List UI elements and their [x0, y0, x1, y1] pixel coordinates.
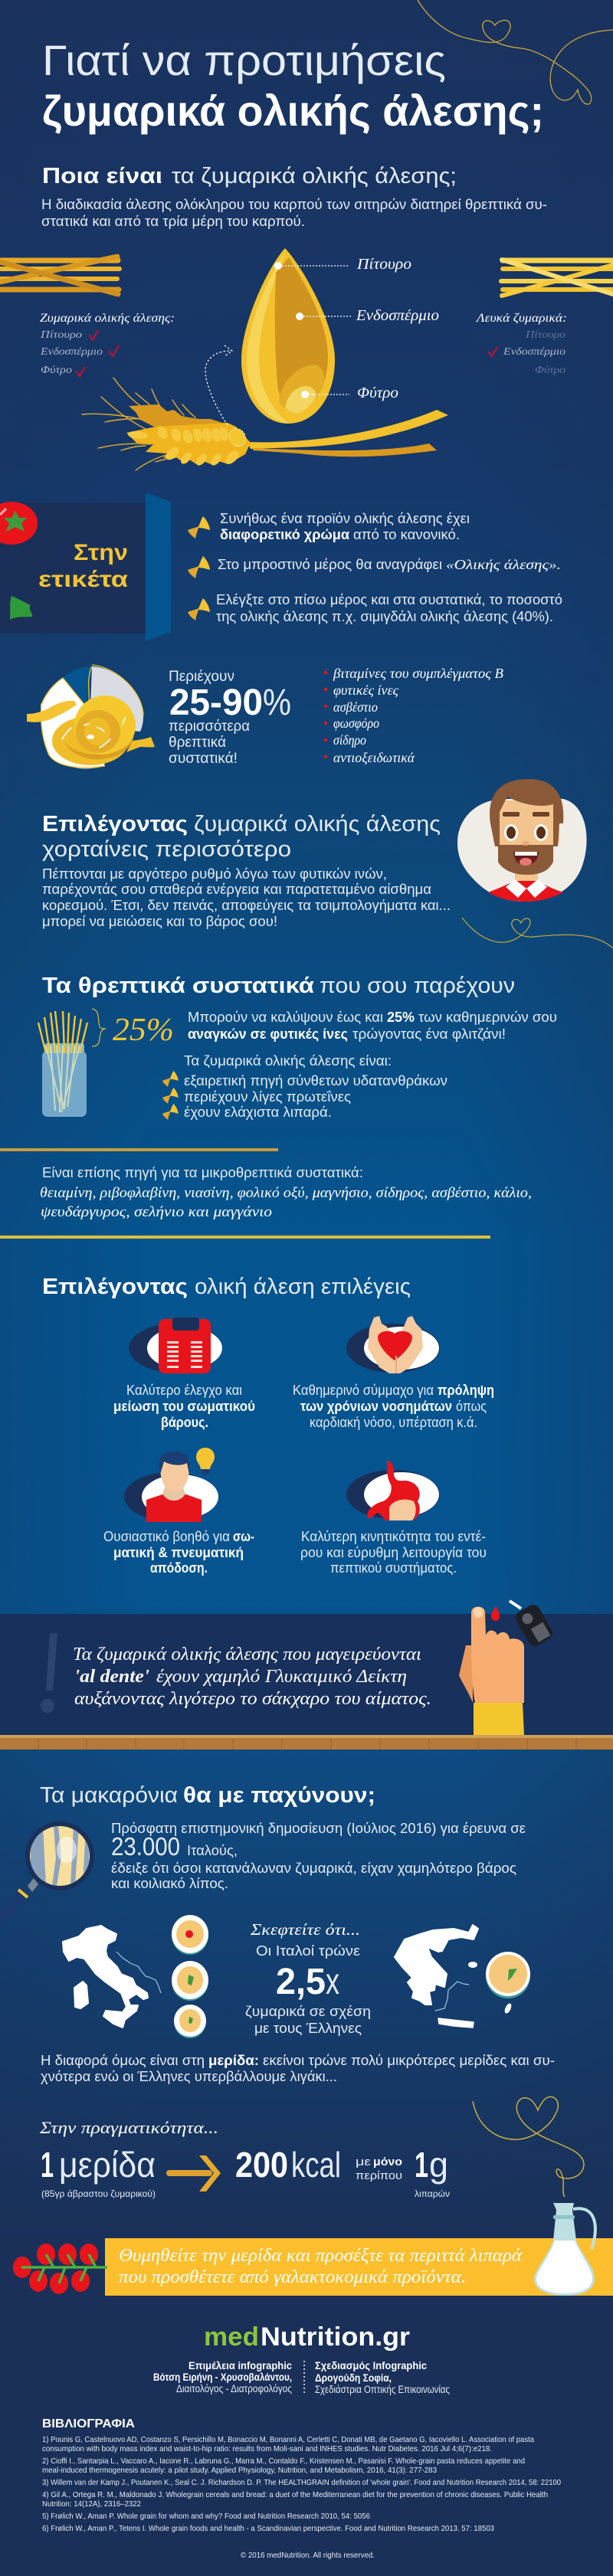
stat: 25-90% more nutrients [169, 669, 291, 767]
list: whole grain pasta parts: Ενδοσπέρμιο [40, 346, 103, 358]
benefit text: weight: Καλύτερο έλεγχο και [126, 1383, 242, 1398]
benefit text: chronic disease: των χρόνιων νοσημάτων [300, 1399, 452, 1414]
text: portion difference: Η διαφορά όμως είναι στη [41, 2052, 205, 2068]
text: micronutrients [40, 1164, 532, 1220]
text: micronutrients: ψευδάργυρος, σελήνιο και μαγγάνιο [41, 1204, 272, 1220]
heading: feeling fuller: ζυμαρικά ολικής άλεσης [194, 812, 441, 836]
icon: hands holding heart [346, 1316, 440, 1373]
credits: editing: Διαιτολόγος - Διατροφολόγος [176, 2383, 292, 2394]
list of nutrients: φωσφόρο [333, 715, 379, 731]
references: 6) Frølich W., Aman P., Tetens I. Whole grain foods and health - a Scandinavian perspective. Food and Nutrition Research 2013. 57: 18503 [42, 2524, 494, 2533]
icon: scale [129, 1317, 222, 1373]
logo: medNutrition.gr [204, 2322, 410, 2352]
text: 23,000 Italians study: Ιταλούς, [187, 1843, 238, 1858]
benefit text: digestion [300, 1529, 487, 1576]
heading: will pasta make me fat [40, 1783, 375, 1808]
references: Nutrition: 14(12A), 2316–2322 [42, 2499, 141, 2509]
heading: on the label: ετικέτα [38, 567, 129, 592]
map: Greece [395, 1925, 513, 2028]
label tip 1: από το κανονικό. [353, 526, 460, 542]
callout text: αυξάνοντας λιγότερο το σάκχαρο του αίματος. [74, 1689, 431, 1709]
stat: 200 kcal [235, 2145, 341, 2185]
benefit text: chronic disease: όπως [456, 1399, 487, 1414]
stat: 25-90% more nutrients: Περιέχουν [169, 669, 234, 685]
title: ζυμαρικά ολικής άλεσης; [42, 87, 544, 135]
stat: Italians eat 2.5x: ζυμαρικά σε σχέση [245, 2003, 371, 2019]
heading: what is whole grain pasta: τα ζυμαρικά ολικής άλεσης; [172, 164, 457, 188]
banner: watch the portion: Θυμηθείτε την μερίδα και προσέξτε τα περιττά λιπαρά [119, 2246, 522, 2266]
list: white pasta parts: Φύτρο [535, 365, 565, 376]
stat: 1 g fat: λιπαρών [415, 2188, 450, 2199]
intro text: Η διαδικασία άλεσης ολόκληρου του καρπού των σιτηρών διατηρεί θρεπτικά συ- [41, 197, 547, 212]
text: portion difference [41, 2052, 555, 2084]
text: 23,000 Italians study: και κοιλιακό λίπος. [111, 1875, 228, 1891]
heading: benefits [42, 1275, 411, 1299]
text: micronutrients: Είναι επίσης πηγή για τα μικροθρεπτικά συστατικά: [42, 1164, 363, 1180]
list: whole grain pasta parts: Πίτουρο [40, 329, 82, 341]
benefit text: chronic disease [293, 1383, 494, 1430]
list: whole grain pasta parts: Ζυμαρικά ολικής άλεσης: [40, 312, 175, 325]
exclamation mark [41, 1633, 57, 1713]
text: 23,000 Italians study: Πρόσφατη επιστημονική δημοσίευση (Ιούλιος 2016) για έρευνα σε [111, 1820, 526, 1836]
benefit text: digestion: ρου και εύρυθμη λειτουργία του [300, 1545, 487, 1560]
list: whole grain pasta parts [40, 312, 175, 376]
label tip 1: διαφορετικό χρώμα [220, 526, 350, 542]
list of nutrients: σίδηρο [333, 732, 366, 748]
benefit text: weight [113, 1383, 255, 1430]
text: 25 percent fibre: αναγκών σε φυτικές ίνες [188, 1026, 348, 1042]
text: portion difference: χνότερα ενώ οι Έλληνες υπερβάλλουμε λιγάκι... [41, 2068, 337, 2084]
plate: one large portion [486, 1952, 530, 1998]
panel: on the label [0, 493, 171, 641]
references: 4) Gil A., Ortega R. M., Maldonado J. Wholegrain cereals and bread: a duet of the Mediterranean diet for the prevention of chronic diseases. Public Health [42, 2490, 548, 2499]
text: 25 percent fibre [188, 1009, 557, 1042]
list: properties of whole grain pasta [162, 1052, 447, 1120]
stat: 25-90% more nutrients: θρεπτικά [169, 735, 226, 751]
list: properties of whole grain pasta: περιέχουν λίγες πρωτεΐνες [184, 1088, 351, 1105]
icon: cherry tomatoes on the vine [13, 2244, 107, 2294]
heading: benefits: Επιλέγοντας [42, 1275, 188, 1299]
label tip 2 [188, 556, 561, 578]
label: germ: Φύτρο [357, 385, 398, 401]
heading: nutrients [42, 974, 515, 998]
logo: medNutrition.gr: Nutrition.gr [261, 2322, 410, 2352]
stat: Italians eat 2.5x [245, 1920, 371, 2036]
decorative curl with heart: right middle [462, 918, 613, 948]
stat: Italians eat 2.5x: Σκεφτείτε ότι... [250, 1920, 360, 1939]
text: with only about [356, 2155, 402, 2182]
stat: 1 portion: 1 [41, 2145, 54, 2185]
benefit text: chronic disease: πρόληψη [438, 1383, 494, 1398]
stat: 1 g fat: 1 [415, 2145, 428, 2185]
banner: watch the portion [105, 2238, 613, 2296]
heading: what is whole grain pasta: Ποια είναι [42, 164, 162, 188]
heading: feeling fuller: Επιλέγοντας [42, 812, 188, 836]
label tip 2: «Ολικής άλεσης». [446, 557, 561, 572]
icon: tomato [0, 502, 38, 545]
list of nutrients: ασβέστιο [333, 699, 378, 715]
title [42, 36, 544, 135]
credits: editing: Βότση Ειρήνη - Χρυσοβαλάντου, [153, 2371, 292, 2383]
stat: 200 kcal: 200 [235, 2145, 288, 2185]
text: fullness paragraph: κορεσμού. Έτσι, δεν πεινάς, αποφεύγεις τα τσιμπολογήματα και... [42, 898, 451, 913]
label: endosperm [296, 307, 439, 324]
stat: Italians eat 2.5x: x [326, 1962, 339, 2002]
panel: al dente callout [0, 1601, 613, 1750]
list: whole grain pasta parts: Φύτρο [41, 365, 72, 376]
benefit text: performance: απόδοση. [150, 1560, 208, 1576]
references: 1) Pounis G, Castelnuovo AD, Costanzo S, Persichillo M, Bonaccio M, Bonanni A, Cerletti C, Donati MB, de Gaetano G, Iacoviello L. Association of pasta [42, 2435, 534, 2444]
stat: 25-90% more nutrients: 25-90 [169, 682, 263, 723]
references: consumption with body mass index and waist-to-hip ratio: results from Moli-sani and INHES studies. Nutr Diabetes. 2016 Jul 4;6(7):e218. [42, 2444, 492, 2453]
label tip 3 [188, 591, 562, 624]
benefit text: performance: σω- [233, 1529, 254, 1544]
callout text: Τα ζυμαρικά ολικής άλεσης που μαγειρεύονται [73, 1645, 421, 1664]
benefit text: chronic disease: καρδιακή νόσο, υπέρταση κ.ά. [310, 1415, 477, 1430]
heading: bibliography: ΒΙΒΛΙΟΓΡΑΦΙΑ [42, 2417, 135, 2430]
wheat grain cross-section [241, 248, 335, 424]
wood shelf [0, 1735, 613, 1750]
icon: milk jug [534, 2203, 595, 2296]
stat: 200 kcal: kcal [291, 2145, 341, 2185]
references [42, 2435, 561, 2533]
text: with only about: περίπου [356, 2169, 402, 2182]
list of nutrients: φυτικές ίνες [333, 682, 399, 698]
text: 25 percent fibre: τρώγοντας ένα φλιτζάνι! [352, 1026, 506, 1042]
label tip 3: Ελέγξτε στο πίσω μέρος και στα συστατικά, το ποσοστό [216, 591, 562, 607]
icon: man with light bulb [124, 1448, 218, 1522]
icon: finger, blood drop and glucose meter [459, 1601, 555, 1735]
heading: will pasta make me fat: θα με παχύνουν; [183, 1783, 375, 1808]
title: Γιατί να προτιμήσεις [42, 36, 446, 84]
plates: three small portions [172, 1915, 208, 2038]
pie chart with pasta nest [27, 665, 155, 768]
benefit text: digestion: πεπτικού συστήματος. [330, 1560, 457, 1576]
label: endosperm: Ενδοσπέρμιο [356, 307, 439, 324]
map: Italy [63, 1926, 161, 2028]
list of nutrients: αντιοξειδωτικά [333, 750, 415, 765]
text: 25 percent fibre: 25% [387, 1009, 415, 1025]
text: fullness paragraph: παρέχοντάς σου σταθερά ενέργεια και παρατεταμένο αίσθημα [42, 882, 431, 897]
credits: design: Σχεδιάστρια Οπτικής Επικοινωνίας [315, 2384, 450, 2395]
icon: jar of spaghetti [38, 1011, 87, 1117]
callout text: 'al dente' [74, 1667, 149, 1687]
banner: watch the portion: που προσθέτετε από γαλακτοκομικά προϊόντα. [119, 2267, 466, 2287]
list: white pasta parts: Ενδοσπέρμιο [503, 346, 565, 358]
label tip 1: Συνήθως ένα προϊόν ολικής άλεσης έχει [220, 510, 470, 526]
stat: Italians eat 2.5x: Οι Ιταλοί τρώνε [256, 1943, 360, 1959]
arrow [166, 2155, 221, 2191]
copyright: © 2016 medNutrition. All rights reserved. [241, 2551, 375, 2560]
text: with only about: μόνο [373, 2155, 402, 2168]
heading: on the label [38, 540, 129, 592]
references: 3) Willem van der Kamp J., Poutanen K., Seal C. J. Richardson D. P. The HEALTHGRAIN definition of 'whole grain'. Food and Nutrition Research 2014, 58: 22100 [42, 2478, 561, 2487]
text: 23,000 Italians study: 23.000 [111, 1832, 180, 1861]
stat: 25-90% more nutrients: συστατικά! [169, 751, 238, 767]
text: portion difference: εκείνοι τρώνε πολύ μικρότερες μερίδες και συ- [263, 2052, 555, 2068]
text: micronutrients: θειαμίνη, ριβοφλαβίνη, νιασίνη, φολικό οξύ, μαγνήσιο, σίδηρος, ασβέστιο, κάλιο, [40, 1185, 532, 1201]
credits: design: Δρογούδη Σοφία, [315, 2372, 392, 2384]
text: with only about: με [356, 2155, 371, 2168]
whole grain spaghetti: left [0, 257, 120, 294]
benefit text: weight: μείωση του σωματικού [113, 1399, 255, 1414]
heading: nutrients: που σου παρέχουν [320, 974, 515, 998]
text: fullness paragraph: Πέπτονται με αργότερο ρυθμό λόγω των φυτικών ινών, [42, 866, 387, 882]
label tip 2: Στο μπροστινό μέρος θα αναγράφει [218, 556, 442, 572]
stat: 1 g fat: g [429, 2145, 448, 2185]
stat: 25-90% more nutrients: περισσότερα [169, 718, 250, 735]
intro text: στατικά και από τα τρία μέρη του καρπού. [41, 214, 305, 229]
icon: magnifying glass over spaghetti [0, 1822, 94, 1920]
heading: will pasta make me fat: Τα μακαρόνια [40, 1783, 178, 1808]
label: germ [301, 385, 398, 401]
stat: 1 portion: (85γρ άβραστου ζυμαρικού) [41, 2188, 156, 2199]
credits: editing: Επιμέλεια infographic [188, 2360, 292, 2371]
brace and 25 percent: 25% [113, 1013, 174, 1048]
text: 25 percent fibre: των καθημερινών σου [418, 1009, 557, 1025]
list of nutrients [324, 666, 503, 765]
brace and 25 percent [92, 1009, 174, 1048]
callout text: έχουν χαμηλό Γλυκαιμικό Δείκτη [156, 1667, 407, 1687]
stat: 25-90% more nutrients: % [263, 682, 291, 723]
heading: feeling fuller [42, 812, 441, 862]
benefit text: digestion: Καλύτερη κινητικότητα του εντέ- [301, 1529, 486, 1544]
decorative curl with heart: bottom right [473, 2096, 584, 2197]
stat: Italians eat 2.5x: με τους Έλληνες [254, 2020, 362, 2036]
benefit text: performance: ματική & πνευματική [113, 1545, 244, 1560]
stat: 1 portion [41, 2145, 156, 2199]
heading: what is whole grain pasta [42, 164, 457, 188]
benefit text: chronic disease: Καθημερινό σύμμαχο για [293, 1383, 434, 1398]
heading: feeling fuller: χορταίνεις περισσότερο [42, 837, 291, 862]
references: 5) Frølich W., Aman P. Whole grain for whom and why? Food and Nutrition Research 2010, 54: 5056 [42, 2512, 370, 2521]
label: bran [274, 256, 411, 273]
references: meal-induced thermogenesis acutely: a pilot study. Applied Physiology, Nutrition, and Metabolism, 2016, 41(3): 277-283 [42, 2466, 437, 2475]
label: bran: Πίτουρο [356, 256, 411, 273]
credits: design: Σχεδιασμός Infographic [315, 2360, 427, 2371]
label tip 3: της ολικής άλεσης π.χ. σιμιγδάλι ολικής άλεσης (40%). [216, 608, 553, 624]
callout text [73, 1645, 431, 1709]
stat: 1 g fat [415, 2145, 450, 2199]
text: 23,000 Italians study [111, 1820, 526, 1891]
icon: basil leaf [10, 596, 32, 620]
text: fullness paragraph [42, 866, 451, 929]
list: properties of whole grain pasta: εξαιρετική πηγή σύνθετων υδατανθράκων [184, 1072, 447, 1088]
list: properties of whole grain pasta: έχουν ελάχιστα λιπαρά. [184, 1104, 332, 1120]
illustration: smiling bearded man [457, 779, 587, 902]
text: fullness paragraph: μπορεί να μειώσεις και το βάρος σου! [42, 914, 277, 929]
heading: nutrients: Τα θρεπτικά συστατικά [42, 974, 314, 998]
benefit text: weight: βάρους. [161, 1415, 208, 1430]
list: white pasta parts: Πίτουρο [525, 329, 565, 341]
text: in reality: Στην πραγματικότητα... [39, 2118, 218, 2137]
credits: design [315, 2360, 450, 2395]
benefit text: performance: Ουσιαστικό βοηθό για [103, 1529, 230, 1544]
dotted arrow from wheat to grain [205, 345, 232, 425]
references: 2) Cioffi I., Santarpia L., Vaccaro A., Iacone R., Labruna G., Marra M., Contaldo F., Kristensen M., Pasanisi F. Whole-grain pasta reduces appetite and [42, 2457, 525, 2466]
list: white pasta parts: Λευκά ζυμαρικά: [475, 312, 567, 325]
icon: stomach [346, 1461, 440, 1520]
logo: medNutrition.gr: med [204, 2322, 259, 2352]
label tip 1 [188, 510, 470, 542]
stat: 1 portion: μερίδα [59, 2145, 156, 2185]
white spaghetti: right [501, 260, 613, 296]
stat: Italians eat 2.5x: 2,5 [276, 1962, 326, 2002]
benefit text: performance [103, 1529, 254, 1576]
decorative curl with hearts: top right [418, 0, 613, 104]
heading: benefits: ολική άλεση επιλέγεις [195, 1275, 411, 1299]
list: white pasta parts [475, 312, 567, 376]
text: 25 percent fibre: Μπορούν να καλύψουν έως και [188, 1009, 383, 1025]
list of nutrients: βιταμίνες του συμπλέγματος Β [333, 666, 503, 681]
heading: on the label: Στην [74, 540, 128, 565]
intro text [41, 197, 547, 229]
text: portion difference: μερίδα: [208, 2052, 259, 2068]
wheat ear illustration [82, 378, 448, 470]
text: 23,000 Italians study: έδειξε ότι όσοι κατανάλωναν ζυμαρικά, είχαν χαμηλότερο βάρος [111, 1860, 516, 1876]
credits: editing [153, 2360, 292, 2394]
list: properties of whole grain pasta: Τα ζυμαρικά ολικής άλεσης είναι: [184, 1052, 392, 1069]
